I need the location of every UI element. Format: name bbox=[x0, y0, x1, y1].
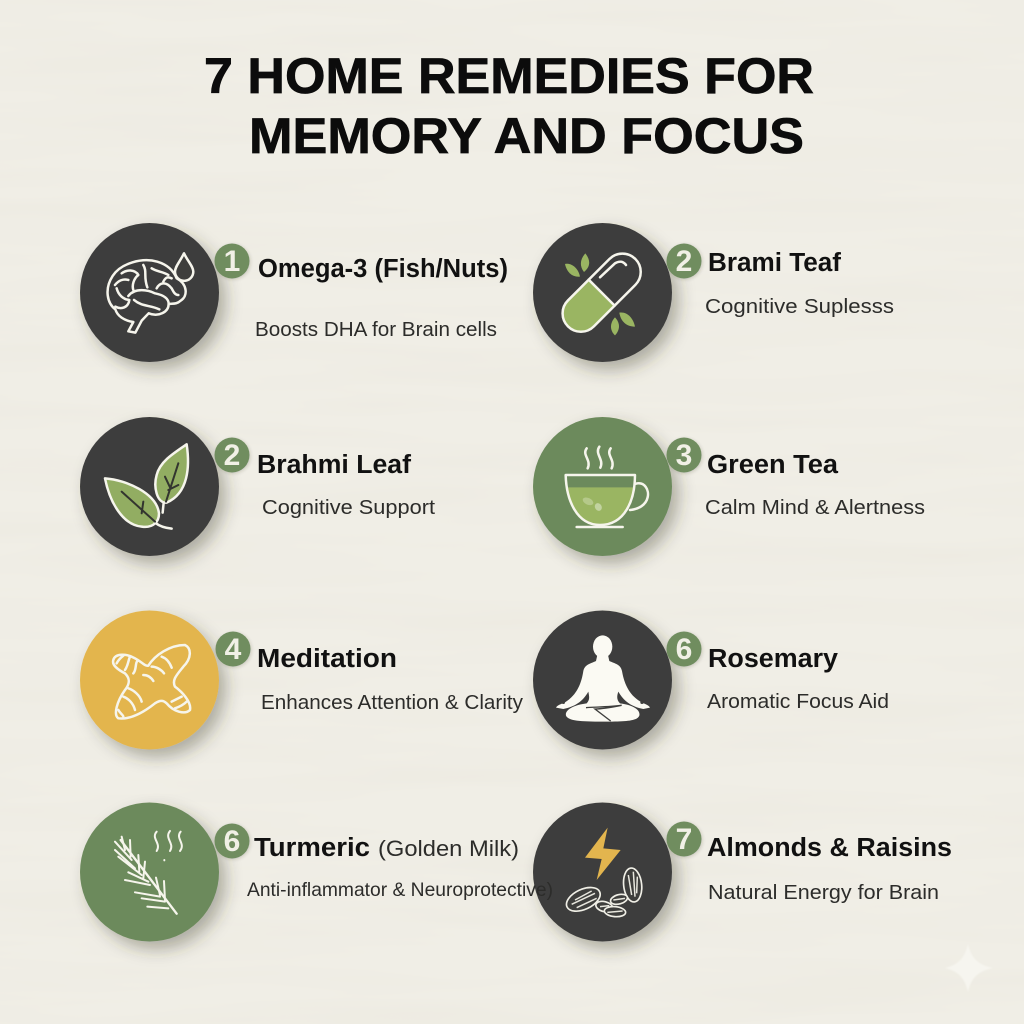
icon: two leaves on dark circle bbox=[80, 417, 219, 556]
heading and description: Cognitive Support bbox=[262, 496, 435, 519]
heading and description: Almonds & Raisins bbox=[707, 834, 952, 862]
number badge 4 bbox=[216, 632, 250, 666]
heading and description: Green Tea bbox=[707, 451, 839, 479]
icon: rosemary sprig on green circle bbox=[80, 802, 219, 942]
heading and description: Cognitive Suplesss bbox=[705, 295, 894, 318]
heading and description: Natural Energy for Brain bbox=[708, 881, 939, 904]
heading and description: Meditation bbox=[257, 645, 397, 673]
heading and description: (Golden Milk) bbox=[378, 836, 519, 861]
icon: capsule with leaves on dark circle bbox=[533, 223, 672, 362]
heading and description bbox=[257, 451, 435, 519]
heading and description: Rosemary bbox=[708, 645, 839, 673]
number badge 3 bbox=[666, 438, 702, 472]
number badge 2: 2 bbox=[224, 439, 240, 472]
heading and description: Boosts DHA for Brain cells bbox=[255, 318, 497, 341]
icon: brain and drop on dark circle bbox=[80, 223, 219, 362]
heading and description: Omega-3 (Fish/Nuts) bbox=[258, 255, 508, 283]
icon: faint sparkle bbox=[945, 944, 993, 992]
heading and description: Turmeric bbox=[254, 834, 370, 862]
heading and description: Brahmi Leaf bbox=[257, 451, 412, 479]
heading and description: Calm Mind & Alertness bbox=[705, 496, 925, 519]
number badge 7 bbox=[666, 822, 702, 856]
icon: lightning bolt and almonds on dark circle bbox=[533, 802, 672, 942]
number badge 6 bbox=[214, 824, 250, 858]
number badge 2 bbox=[666, 244, 702, 278]
number badge 6: 6 bbox=[224, 825, 240, 858]
icon: meditating figure on dark circle bbox=[533, 610, 672, 750]
icon: turmeric root on yellow circle bbox=[80, 610, 219, 750]
number badge 1 bbox=[214, 244, 250, 278]
heading and description: Aromatic Focus Aid bbox=[707, 690, 889, 713]
heading and description bbox=[247, 834, 553, 901]
number badge 6 bbox=[666, 632, 702, 666]
heading and description: Brami Teaf bbox=[708, 249, 842, 277]
panel: rosemary bbox=[533, 610, 889, 750]
title bbox=[204, 48, 814, 164]
heading and description bbox=[255, 255, 508, 341]
heading and description bbox=[707, 645, 889, 713]
icon: steaming cup on green circle bbox=[533, 417, 672, 556]
heading and description bbox=[705, 451, 925, 519]
heading and description bbox=[257, 645, 524, 714]
panel: meditation bbox=[80, 610, 524, 750]
heading and description bbox=[705, 249, 894, 318]
number badge 4: 4 bbox=[225, 633, 242, 666]
number badge 7: 7 bbox=[676, 823, 692, 856]
panel: brami teaf bbox=[533, 223, 894, 362]
number badge 3: 3 bbox=[676, 439, 692, 472]
panel: brahmi leaf bbox=[80, 417, 435, 556]
title: MEMORY AND FOCUS bbox=[249, 108, 804, 164]
heading and description: Enhances Attention & Clarity bbox=[261, 691, 524, 714]
panel: turmeric bbox=[80, 802, 553, 942]
panel: green tea bbox=[533, 417, 925, 556]
panel: omega-3 bbox=[80, 223, 508, 362]
number badge 2 bbox=[214, 438, 250, 472]
heading and description bbox=[707, 834, 952, 904]
title: 7 HOME REMEDIES FOR bbox=[204, 48, 814, 104]
number badge 2: 2 bbox=[676, 245, 692, 278]
heading and description: Anti-inflammator & Neuroprotective) bbox=[247, 879, 553, 901]
panel: almonds and raisins bbox=[533, 802, 952, 942]
number badge 1: 1 bbox=[224, 245, 240, 278]
number badge 6: 6 bbox=[676, 633, 692, 666]
